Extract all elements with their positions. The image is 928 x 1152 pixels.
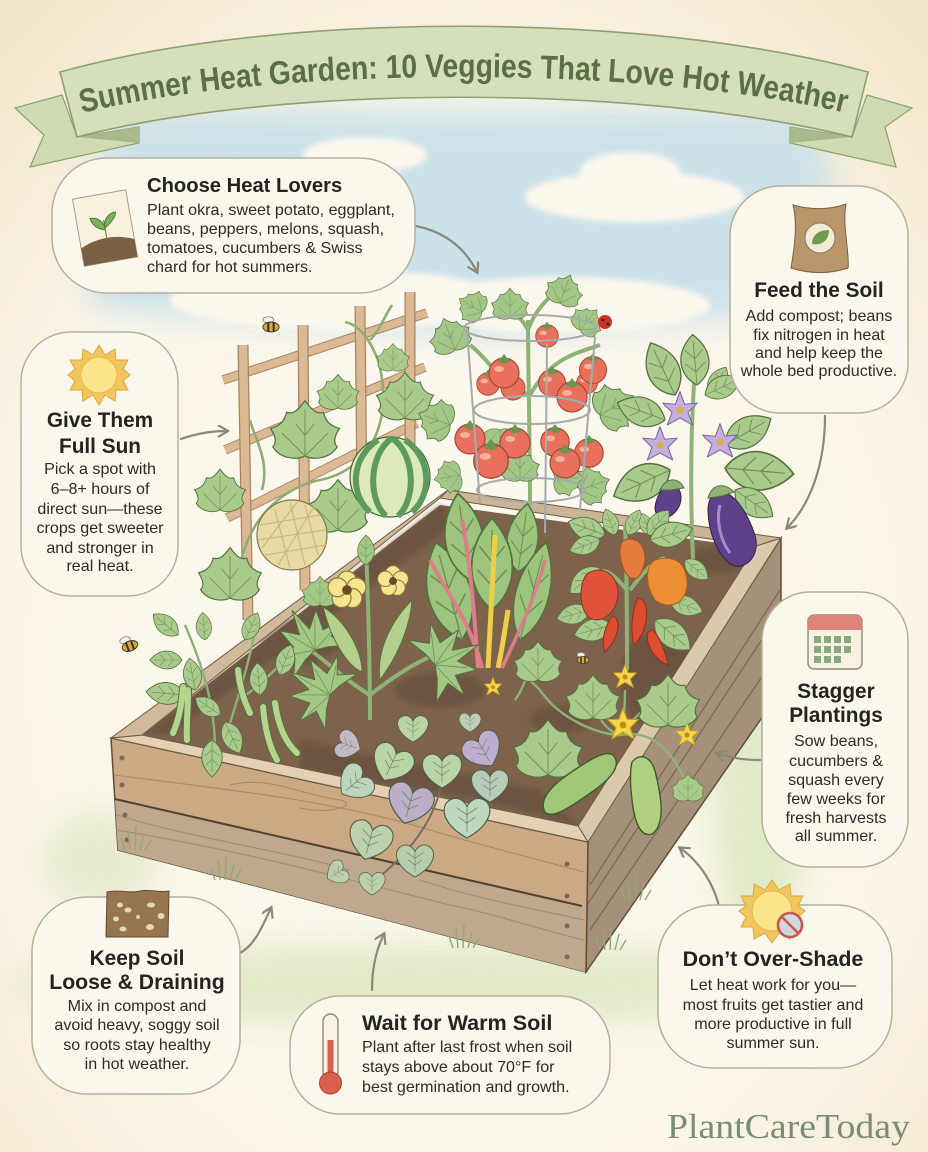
- arrow: stagger to cucumbers: [717, 753, 760, 760]
- text: so roots stay healthy: [63, 1036, 212, 1054]
- text: whole bed productive.: [740, 362, 897, 380]
- text: Plant okra, sweet potato, eggplant,: [147, 201, 395, 219]
- peppers: [554, 505, 713, 670]
- heading: Stagger: [797, 680, 875, 703]
- text: squash every: [788, 771, 885, 789]
- bees: [119, 317, 589, 664]
- text: 6–8+ hours of: [51, 480, 150, 498]
- text: Add compost; beans: [746, 307, 892, 325]
- text: direct sun—these: [37, 500, 163, 518]
- text: fresh harvests: [785, 809, 887, 827]
- arrow: keep soil to bed: [240, 908, 271, 953]
- text: best germination and growth.: [362, 1078, 570, 1096]
- text: Mix in compost and: [68, 997, 206, 1015]
- trellis with melons: [194, 292, 434, 620]
- panel: choose heat lovers: [52, 158, 415, 293]
- heading: Keep Soil: [90, 947, 184, 970]
- eggplant fruit: [708, 492, 756, 566]
- bed front side: [111, 738, 588, 972]
- tomato plant in cage: [411, 269, 645, 533]
- heading: Wait for Warm Soil: [362, 1010, 552, 1035]
- text: tomatoes, cucumbers & Swiss: [147, 239, 363, 257]
- arrow: heat lovers to tomatoes: [416, 226, 477, 272]
- text: Let heat work for you—: [690, 976, 857, 994]
- text: summer sun.: [726, 1034, 820, 1052]
- text: cucumbers &: [789, 752, 883, 770]
- text: Pick a spot with: [44, 460, 156, 478]
- arrow: warm soil to bed: [372, 934, 384, 990]
- watermelon: [350, 437, 430, 517]
- sweet potato vine: [321, 713, 509, 895]
- okra: [259, 535, 495, 735]
- panel: feed the soil: [730, 186, 908, 413]
- text: crops get sweeter: [36, 519, 164, 537]
- icon: soil block: [106, 890, 169, 937]
- text: fix nitrogen in heat: [753, 326, 885, 344]
- text: Sow beans,: [794, 732, 878, 750]
- icon: sun with no-shade sign: [739, 880, 805, 943]
- text: real heat.: [66, 557, 134, 575]
- text: stays above about 70°F for: [362, 1058, 555, 1076]
- heading: Feed the Soil: [754, 279, 884, 302]
- text: all summer.: [795, 827, 877, 845]
- icon: sun: [68, 345, 130, 405]
- panel: wait for warm soil: [290, 996, 610, 1114]
- panel: give them full sun: Full Sun: [59, 435, 141, 458]
- text: and help keep the: [755, 344, 883, 362]
- icon: seed packet: [73, 190, 137, 266]
- arrow: feed the soil to bed: [787, 416, 825, 528]
- text: and stronger in: [46, 539, 154, 557]
- raised garden bed: [111, 490, 781, 972]
- text: chard for hot summers.: [147, 258, 312, 276]
- title: Summer Heat Garden: 10 Veggies That Love Hot Weather: [80, 53, 849, 112]
- panel: keep soil loose: Loose & Draining: [49, 971, 225, 994]
- tomato cage: [464, 315, 596, 533]
- eggplant: [606, 333, 795, 566]
- icon: thermometer: [320, 1014, 342, 1094]
- cantaloupe: [257, 500, 327, 570]
- title banner: [14, 26, 914, 168]
- text: most fruits get tastier and: [683, 996, 863, 1014]
- bed soil: [142, 505, 756, 826]
- arrow: full sun to trellis: [181, 431, 227, 439]
- panel: stagger plantings: Plantings: [789, 704, 883, 727]
- text: in hot weather.: [85, 1055, 189, 1073]
- text: avoid heavy, soggy soil: [54, 1016, 220, 1034]
- heading: Choose Heat Lovers: [147, 175, 342, 197]
- text: beans, peppers, melons, squash,: [147, 220, 384, 238]
- bed right side: [586, 538, 781, 972]
- arrow: over-shade to bed: [680, 848, 720, 911]
- text: few weeks for: [787, 790, 886, 808]
- text: more productive in full: [694, 1015, 852, 1033]
- logo: PlantCareToday: PlantCareToday: [667, 1107, 911, 1146]
- icon: calendar: [808, 615, 862, 669]
- panel: don't over-shade: [658, 880, 892, 1068]
- text: Plant after last frost when soil: [362, 1038, 572, 1056]
- chard: [415, 491, 562, 668]
- panel: give them full sun: [21, 332, 178, 596]
- icon: compost bag: [791, 204, 848, 272]
- heading: Don’t Over-Shade: [683, 947, 863, 971]
- cucumbers: [484, 642, 704, 835]
- panel: keep soil loose: [32, 890, 240, 1094]
- panel: stagger plantings: [762, 592, 908, 867]
- ladybug: [598, 315, 612, 329]
- trellis: [223, 292, 427, 620]
- beans: [145, 607, 299, 777]
- heading: Give Them: [47, 409, 153, 432]
